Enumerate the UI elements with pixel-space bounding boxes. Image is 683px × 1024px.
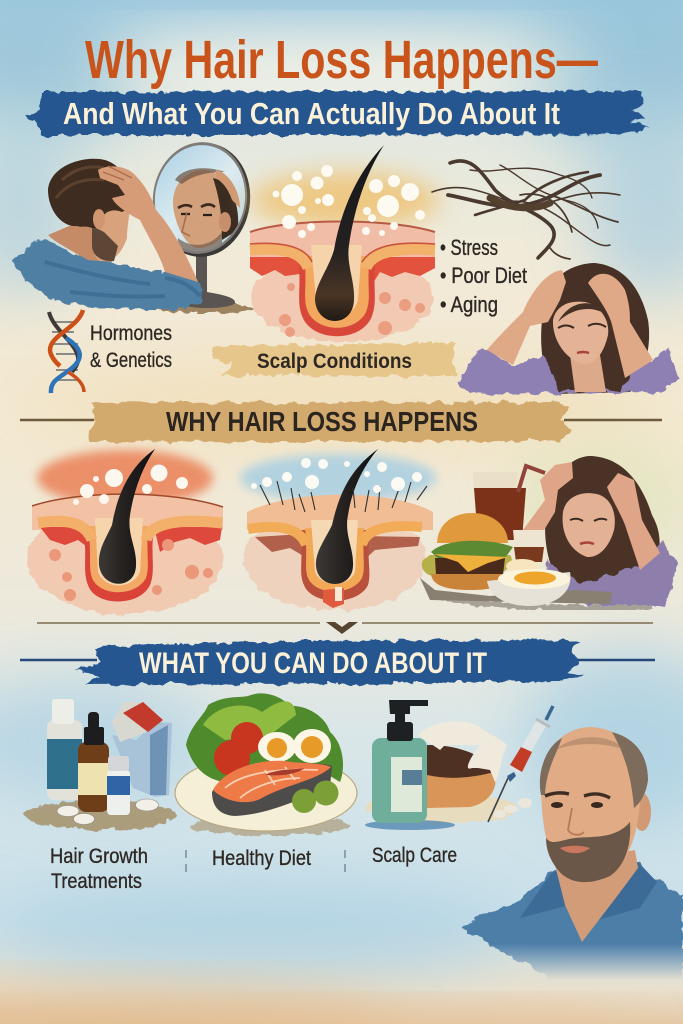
- woman's hair: [545, 456, 660, 590]
- salad greens: [186, 693, 343, 783]
- woman's face: [553, 302, 608, 364]
- illustration: man looking in mirror: [14, 136, 257, 313]
- man's shirt: [460, 862, 683, 985]
- small bottle: [107, 756, 130, 815]
- woman's sleeve: [545, 540, 677, 605]
- woman's neck: [570, 355, 606, 392]
- burger: [437, 513, 508, 543]
- flakes: [272, 165, 425, 238]
- pills: [57, 799, 158, 824]
- heading: why hair loss happens: [20, 402, 662, 442]
- woman's sleeves and top: [458, 348, 680, 394]
- illustration: scalp care: [365, 700, 553, 830]
- illustration: follicle with flakes diagram: [240, 449, 436, 610]
- man's ear: [633, 793, 651, 831]
- bottle: [47, 699, 82, 800]
- man's neck: [555, 850, 638, 942]
- illustration: scalp cross-section top: [250, 145, 440, 342]
- pump bottle: [372, 700, 428, 823]
- man's beard: [92, 226, 118, 261]
- device head: [112, 702, 163, 742]
- heading: what you can do about it: [20, 640, 655, 685]
- drink: [473, 472, 526, 540]
- text: causes list: • Stress: [440, 235, 498, 260]
- illustration: fast food and stressed woman: [420, 456, 677, 609]
- label: hormones and genetics: [90, 322, 172, 372]
- banner: subtitle: And What You Can Actually Do About It: [63, 96, 560, 131]
- syringe: [488, 706, 553, 822]
- hair shaft: [315, 145, 384, 321]
- heading: what you can do about it: WHAT YOU CAN DO ABOUT IT: [139, 647, 487, 680]
- label: scalp conditions: Scalp Conditions: [257, 350, 412, 373]
- text: causes list: • Poor Diet: [440, 263, 527, 288]
- label: hormones and genetics: & Genetics: [90, 349, 172, 372]
- mirror reflection: [173, 168, 240, 252]
- label: hair growth treatments: Treatments: [51, 870, 142, 893]
- device base: [112, 722, 172, 797]
- mirror frame: [149, 137, 257, 263]
- woman's right arm: [607, 473, 660, 570]
- text: causes list: [440, 235, 527, 317]
- woman's right arm: [588, 274, 653, 378]
- gloved hand: [418, 721, 507, 782]
- label: scalp conditions: [213, 343, 458, 376]
- label: hormones and genetics: Hormones: [90, 322, 172, 345]
- man's neck: [48, 215, 112, 262]
- green vegetables: [292, 780, 338, 813]
- mirror stand: [182, 256, 235, 308]
- tomatoes: [214, 722, 263, 776]
- woman's left arm: [487, 270, 566, 365]
- illustration: healthy diet plate: [175, 693, 357, 835]
- illustration: smiling balding man: [460, 727, 683, 985]
- man's beard: [546, 822, 630, 882]
- label: hair growth treatments: [50, 845, 148, 893]
- illustration: fallen hair strands: [432, 161, 620, 259]
- man's face: [92, 200, 130, 261]
- man's hair: [48, 159, 130, 228]
- egg bowl: [506, 559, 538, 573]
- divider with arrow: [37, 622, 653, 634]
- head sample: [427, 745, 496, 808]
- woman's face: [563, 493, 615, 557]
- eggs: [258, 729, 331, 763]
- serum dropper: [78, 712, 109, 812]
- man's shirt: [14, 238, 205, 310]
- label: healthy diet: Healthy Diet: [212, 847, 311, 870]
- illustration: woman holding head top: [458, 263, 680, 394]
- man's scalp stubble: [555, 737, 625, 750]
- rocks: [494, 798, 532, 818]
- woman's left arm: [523, 462, 573, 540]
- man's arm and hand: [98, 166, 198, 282]
- illustration: hair growth treatments products: [25, 699, 175, 830]
- man's head: [541, 727, 641, 880]
- woman's hair: [541, 263, 649, 394]
- icon: DNA helix: [49, 310, 84, 393]
- man's brows and eyes: [545, 793, 610, 798]
- man's hair sides: [540, 732, 648, 808]
- label: scalp care: Scalp Care: [372, 844, 457, 867]
- treatment labels: [50, 844, 457, 893]
- table: [420, 578, 612, 604]
- label: hair growth treatments: Hair Growth: [50, 845, 148, 868]
- heading: why hair loss happens: WHY HAIR LOSS HAPPENS: [166, 406, 478, 437]
- text: causes list: • Aging: [440, 292, 498, 317]
- salmon: [212, 761, 332, 816]
- illustration: inflamed scalp diagram: [27, 449, 223, 614]
